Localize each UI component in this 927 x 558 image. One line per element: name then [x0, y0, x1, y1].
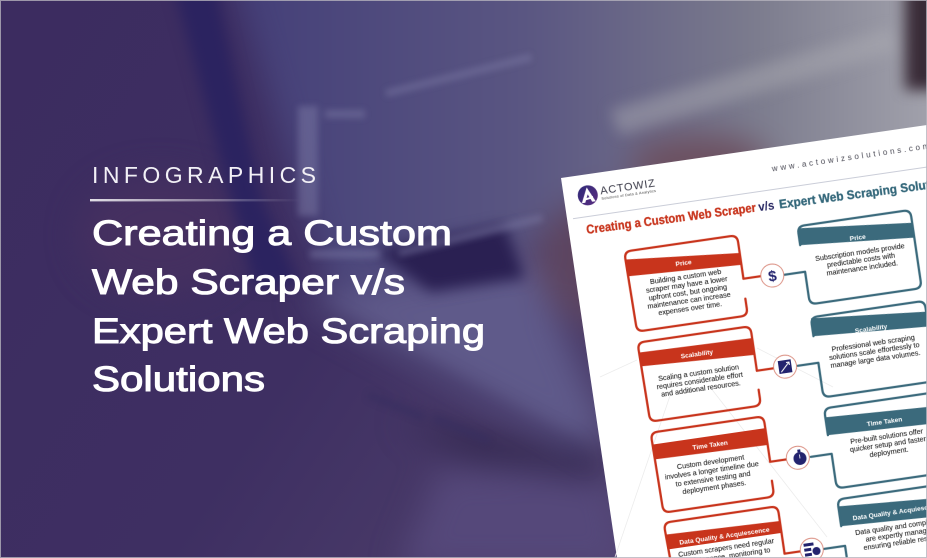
- icon: dollar: $: [767, 267, 778, 286]
- left card: Time Taken: involves a longer timeline due: [664, 459, 759, 482]
- eyebrow label: INFOGRAPHICS: INFOGRAPHICS: [92, 162, 316, 188]
- left card: Scalability: and additional resources.: [660, 378, 741, 399]
- logo: ACTOWIZ: [599, 178, 656, 197]
- sheet title: Creating a Custom Web Scraper: [585, 201, 757, 237]
- logo: [576, 176, 657, 207]
- left card: Scalability: [638, 326, 763, 422]
- main heading: Creating a Custom: [92, 214, 452, 253]
- right card: Scalability: manage large data volumes.: [830, 348, 921, 370]
- left card: Time Taken: to extensive testing and: [675, 469, 751, 489]
- sheet title: v/s: [757, 198, 775, 214]
- right card: Price: [778, 210, 922, 307]
- right card: Data Quality & Acquiescence: [818, 483, 927, 558]
- left card: Scalability: Scaling a custom solution: [658, 362, 740, 383]
- right card: Time Taken: [804, 392, 927, 491]
- right card: Time Taken: quicker setup and faster: [849, 434, 927, 454]
- right card: Time Taken: deployment.: [869, 445, 909, 459]
- sheet paper: [561, 125, 927, 558]
- icon: scalability chart: [772, 354, 798, 380]
- left card: Data Quality & Acquiescence: Data Quality & Acquiescence: [679, 527, 770, 547]
- right card: Price: Price: [849, 234, 867, 243]
- left card: Price: maintenance can increase: [647, 290, 731, 311]
- faint web lines on sheet: [600, 348, 833, 557]
- right card: Scalability: Scalability: [854, 323, 888, 335]
- left card: Scalability: Scalability: [680, 349, 714, 361]
- left card: Price: expenses over time.: [658, 299, 723, 317]
- left card: Time Taken: deployment phases.: [682, 478, 747, 496]
- icon: dollar: [759, 262, 785, 289]
- right card: Scalability: [791, 301, 927, 400]
- icon: stopwatch: [785, 445, 811, 471]
- sheet content: [569, 131, 927, 558]
- left card: Price: Price: [675, 259, 692, 268]
- left card: Price: [624, 235, 750, 332]
- right card: Price: predictable costs with: [826, 251, 896, 269]
- left card: Time Taken: Time Taken: [692, 440, 728, 452]
- left card: Price: Building a custom web: [649, 267, 722, 286]
- right card: Time Taken: Time Taken: [867, 416, 903, 428]
- right card: Scalability: solutions scale effortlessly to: [828, 340, 920, 362]
- main heading: Solutions: [92, 360, 265, 399]
- header divider: [573, 162, 927, 219]
- left card: Time Taken: Custom development: [676, 453, 745, 471]
- right card: Price: Subscription models provide: [815, 241, 905, 263]
- tilted infographic sheet: [561, 125, 927, 558]
- left card: Data Quality & Acquiescence: [664, 506, 786, 558]
- left card: Price: scraper may have a lower: [645, 274, 729, 295]
- main heading: Web Scraper v/s: [92, 263, 405, 302]
- right card: Scalability: Professional web scraping: [831, 333, 915, 354]
- right card: Price: maintenance included.: [826, 258, 898, 278]
- right card: Time Taken: Pre-built solutions offer: [850, 426, 924, 446]
- main heading: Expert Web Scraping: [92, 312, 485, 351]
- connector: scalability left: [757, 368, 774, 371]
- left card: Time Taken: [651, 416, 776, 513]
- sheet title: [585, 175, 927, 237]
- connector: time left: [770, 459, 787, 462]
- left card: Price: upfront cost, but ongoing: [648, 282, 728, 303]
- connector: data left: [785, 551, 800, 554]
- fading rule under eyebrow: [90, 199, 300, 201]
- left card: Scalability: requires considerable effort: [656, 370, 743, 391]
- icon: data quality: [799, 537, 825, 558]
- main heading: [92, 214, 485, 399]
- connector: price left: [743, 276, 760, 279]
- logo: Solutions of Data & Analytics: [601, 189, 656, 201]
